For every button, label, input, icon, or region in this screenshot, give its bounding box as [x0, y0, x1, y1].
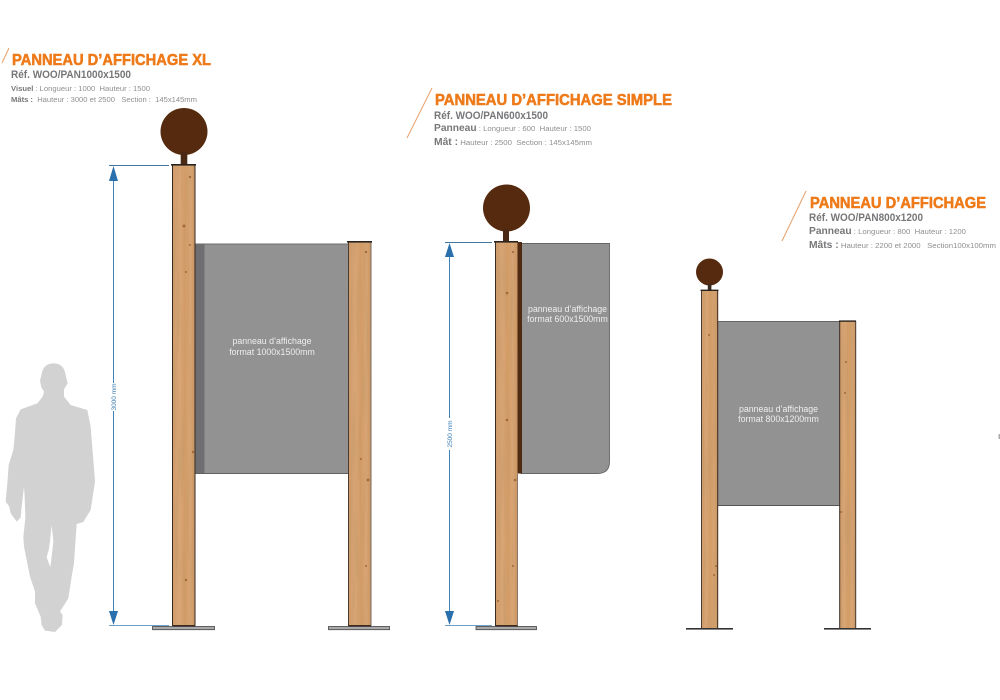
sign text simple: panneau d’affichage [528, 304, 607, 314]
panel specs standard: Panneau : Longueur : 800 Hauteur : 1200 [809, 226, 966, 237]
reference standard: Réf. WOO/PAN800x1200 [809, 212, 923, 224]
ground bars standard [686, 628, 871, 630]
mast specs XL: Mâts : Hauteur : 3000 et 2500 Section : 145x145mm [11, 95, 197, 104]
dimension 2500 mm: 2500 mm [447, 420, 454, 448]
edge mark [998, 434, 1000, 439]
mast specs simple: Mât : Hauteur : 2500 Section : 145x145mm [434, 137, 592, 148]
slash accent XL [2, 48, 9, 63]
left post XL [171, 164, 196, 626]
base plate simple [476, 626, 536, 630]
dimension 3000 mm: 3000 mm [111, 383, 118, 411]
slash accent simple [407, 88, 432, 138]
sign text XL: panneau d’affichage [232, 336, 312, 346]
visual specs XL: Visuel : Longueur : 1000 Hauteur : 1500 [11, 84, 150, 93]
dimension 3000 mm [109, 166, 169, 626]
human silhouette [6, 363, 95, 632]
sign board XL [195, 244, 349, 474]
finial standard [696, 258, 723, 290]
post simple [494, 241, 518, 626]
sign text XL: format 1000x1500mm [229, 347, 315, 357]
sign text standard: format 800x1200mm [738, 414, 819, 424]
reference simple: Réf. WOO/PAN600x1500 [434, 110, 548, 122]
panel: panneau d'affichage simple [407, 88, 672, 630]
dimension 2500 mm [445, 242, 492, 626]
sign board standard [718, 321, 840, 506]
panel: panneau d'affichage [686, 191, 996, 630]
base plates XL [152, 626, 390, 630]
heading standard: PANNEAU D’AFFICHAGE [810, 195, 986, 212]
reference XL: Réf. WOO/PAN1000x1500 [11, 69, 131, 81]
right post XL [347, 241, 372, 626]
left post standard [700, 290, 718, 628]
mounting strip simple [518, 242, 522, 474]
right post standard [839, 320, 856, 628]
panel: panneau d'affichage XL [2, 48, 390, 630]
sign board simple [521, 244, 610, 474]
sign text standard: panneau d’affichage [739, 404, 818, 414]
panel specs simple: Panneau : Longueur : 600 Hauteur : 1500 [434, 123, 591, 134]
mast specs standard: Mâts : Hauteur : 2200 et 2000 Section100x100mm [809, 240, 996, 251]
sign text simple: format 600x1500mm [527, 314, 608, 324]
heading XL: PANNEAU D’AFFICHAGE XL [12, 52, 211, 69]
heading simple: PANNEAU D’AFFICHAGE SIMPLE [435, 92, 672, 109]
finial simple [483, 184, 530, 242]
finial XL [160, 108, 208, 165]
slash accent standard [782, 191, 806, 241]
